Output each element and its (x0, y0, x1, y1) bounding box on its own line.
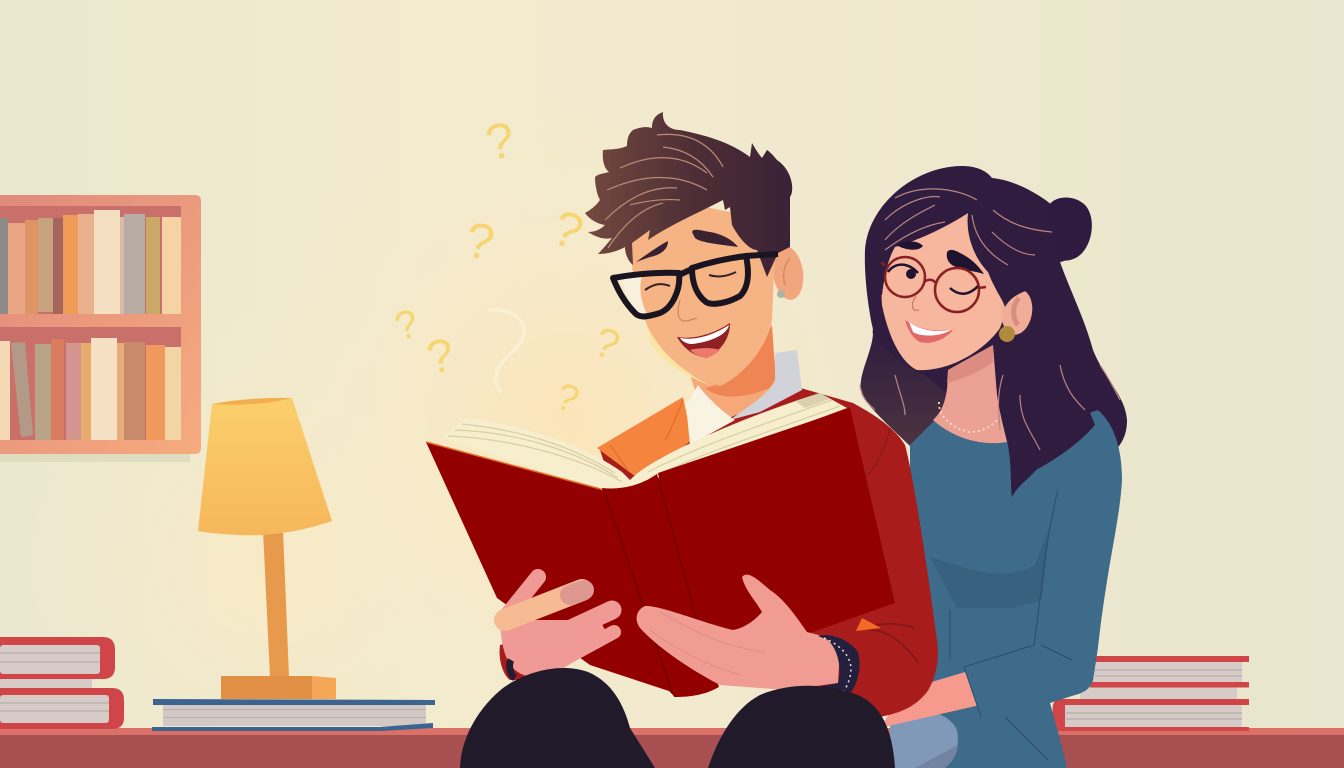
woman: hair overlapping dress (1007, 400, 1095, 497)
book: orange lining (856, 618, 881, 631)
open red book (426, 393, 895, 697)
left hand: palm (500, 612, 610, 678)
left hand: fingers (505, 577, 614, 668)
woman: earring (999, 326, 1015, 342)
man: face (630, 205, 775, 386)
woman: face (882, 213, 1004, 370)
bracelet cuff (802, 635, 860, 700)
floating question marks: ? (390, 301, 423, 350)
man: shirt collar (686, 385, 735, 445)
man: glasses (613, 254, 778, 316)
book: right cover (658, 408, 895, 672)
books: top shelf row (0, 210, 181, 314)
woman: hair bun (1049, 198, 1092, 261)
man: glasses lens shine (622, 275, 648, 316)
woman: dress (910, 410, 1122, 768)
floating question marks: ? (461, 211, 499, 271)
lamp (198, 398, 336, 699)
floating question marks (390, 111, 626, 422)
man: eyes (645, 272, 736, 290)
man (500, 112, 938, 718)
man: earring (777, 290, 785, 298)
bookshelf (0, 195, 201, 462)
woman: hair highlights (860, 189, 1120, 450)
woman: sleeve cuff (964, 640, 1098, 717)
man: hair (585, 112, 792, 277)
woman: ear (998, 287, 1036, 337)
woman: glasses (881, 257, 986, 312)
woman: nose (912, 296, 919, 310)
book stack under lamp (152, 699, 435, 731)
man: hair highlights (605, 134, 723, 248)
right hand (637, 575, 840, 690)
man: mouth (677, 323, 730, 358)
man: nose (678, 300, 697, 321)
man: neck (690, 330, 780, 420)
woman: front hair (868, 170, 1045, 307)
woman: eyebrows (896, 241, 984, 274)
woman: lower left hair tone (861, 330, 955, 453)
floating question marks: ? (550, 375, 584, 422)
book stack right (1052, 656, 1249, 731)
left hand (500, 577, 614, 678)
man: eyebrows (636, 230, 738, 262)
floating question marks: ? (588, 317, 626, 369)
woman (860, 166, 1127, 768)
book stack left (0, 637, 124, 729)
woman: neck (933, 345, 1007, 443)
woman: necklace (939, 402, 997, 432)
woman: mouth (905, 320, 953, 343)
book: pages (441, 393, 847, 491)
man: orange chest (597, 397, 692, 480)
man: ear (769, 244, 807, 302)
man: left sleeve (500, 640, 530, 680)
floating question marks: ? (545, 199, 590, 261)
man: jacket (600, 385, 938, 718)
books: lower shelf row (0, 338, 181, 440)
knees (460, 668, 895, 768)
woman: thigh (890, 711, 958, 768)
woman: hand (880, 672, 980, 728)
floating question marks: ? (423, 327, 458, 384)
table (0, 728, 1344, 768)
book: left cover (426, 442, 672, 692)
book: spine (602, 474, 719, 697)
woman: back hair (861, 166, 1127, 497)
woman: eyes (888, 265, 979, 294)
floating question marks: ? (481, 111, 519, 171)
